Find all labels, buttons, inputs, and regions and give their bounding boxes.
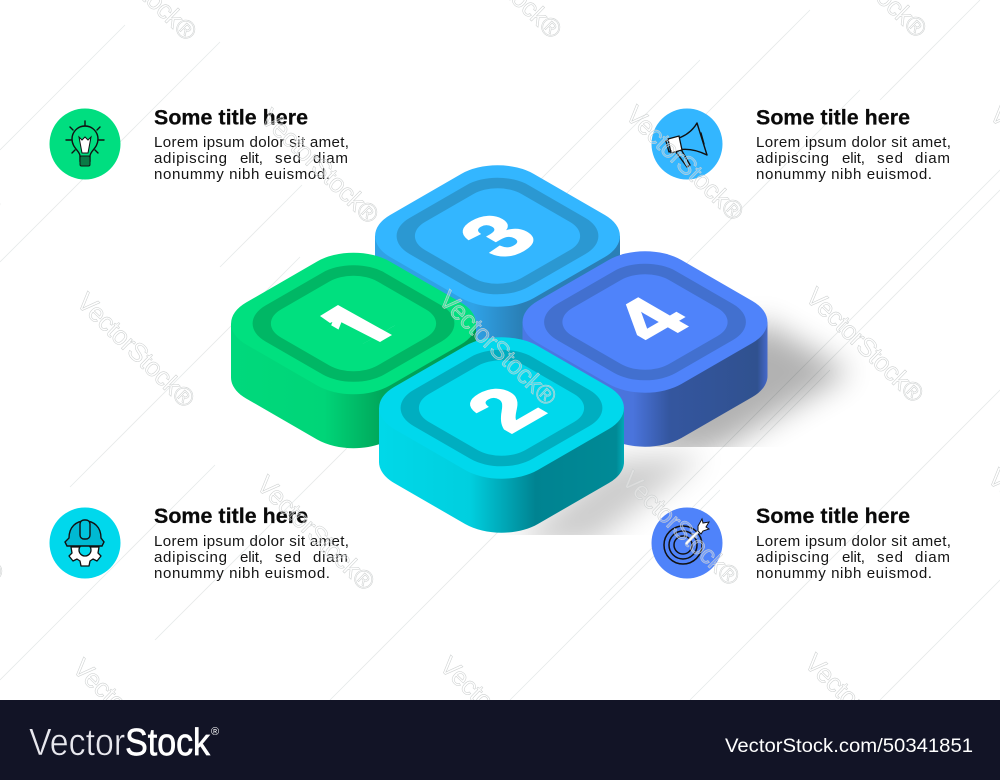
digit 1: 1	[304, 293, 418, 359]
digit 2: 2	[446, 375, 565, 443]
text block: Lorem ipsum dolor sit amet,	[154, 134, 349, 151]
watermarks: VectorStock®	[616, 464, 746, 592]
watermarks: VectorStock®	[67, 652, 197, 780]
text block: elit,	[842, 150, 865, 167]
watermarks: VectorStock®	[800, 281, 930, 409]
panel: bottom-right item	[652, 504, 951, 582]
watermarks: VectorStock®	[434, 650, 564, 778]
icon: light bulb	[50, 108, 120, 180]
block 2	[358, 325, 645, 533]
text block: diam	[915, 150, 950, 167]
watermarks: VectorStock®	[799, 647, 929, 775]
registered mark: ®	[211, 726, 219, 738]
footer image id: VectorStock.com/50341851	[725, 736, 973, 757]
shadow: block 2	[510, 455, 705, 545]
text block: diam	[313, 150, 348, 167]
watermarks: VectorStock®	[71, 286, 201, 414]
icon: megaphone	[652, 108, 722, 180]
block 1	[231, 252, 476, 448]
text block: Lorem ipsum dolor sit amet,	[756, 533, 951, 550]
heading: Some title here	[154, 106, 308, 130]
footer bar	[0, 700, 1000, 780]
text block: adipiscing	[154, 549, 227, 566]
text block: nonummy nibh euismod.	[756, 166, 932, 183]
digit 1	[320, 305, 394, 344]
watermarks: VectorStock®	[433, 284, 563, 412]
panel: top-left item	[50, 106, 349, 183]
watermarks: VectorStock®	[255, 102, 385, 230]
text block: sed	[275, 549, 301, 566]
panel: top-right item	[652, 106, 951, 183]
text block: sed	[275, 150, 301, 167]
heading: Some title here	[154, 504, 308, 528]
text block: Lorem ipsum dolor sit amet,	[154, 533, 349, 550]
text block: adipiscing	[154, 150, 227, 167]
text block: nonummy nibh euismod.	[154, 565, 330, 582]
icon: helmet with gear	[50, 508, 120, 578]
text block: elit,	[240, 549, 263, 566]
heading: Some title here	[756, 504, 910, 528]
heading: Some title here	[756, 106, 910, 130]
text block: adipiscing	[756, 549, 829, 566]
watermarks: VectorStock®	[620, 99, 750, 227]
panel: bottom-left item	[50, 504, 349, 582]
block 4	[501, 239, 789, 447]
text block: sed	[877, 549, 903, 566]
digit 4: 4	[591, 286, 710, 354]
text block: elit,	[842, 549, 865, 566]
text block: diam	[313, 549, 348, 566]
shadow: block 4	[640, 320, 850, 452]
digit 3: 3	[439, 202, 558, 270]
text block: nonummy nibh euismod.	[154, 166, 330, 183]
text block: elit,	[240, 150, 263, 167]
text block: adipiscing	[756, 150, 829, 167]
block 3	[354, 153, 641, 361]
watermarks: VectorStock®	[251, 469, 381, 597]
text block: sed	[877, 150, 903, 167]
text block: Lorem ipsum dolor sit amet,	[756, 134, 951, 151]
icon: target with arrow	[652, 508, 722, 578]
text block: nonummy nibh euismod.	[756, 565, 932, 582]
text block: diam	[915, 549, 950, 566]
footer logo: VectorStock	[29, 722, 211, 764]
